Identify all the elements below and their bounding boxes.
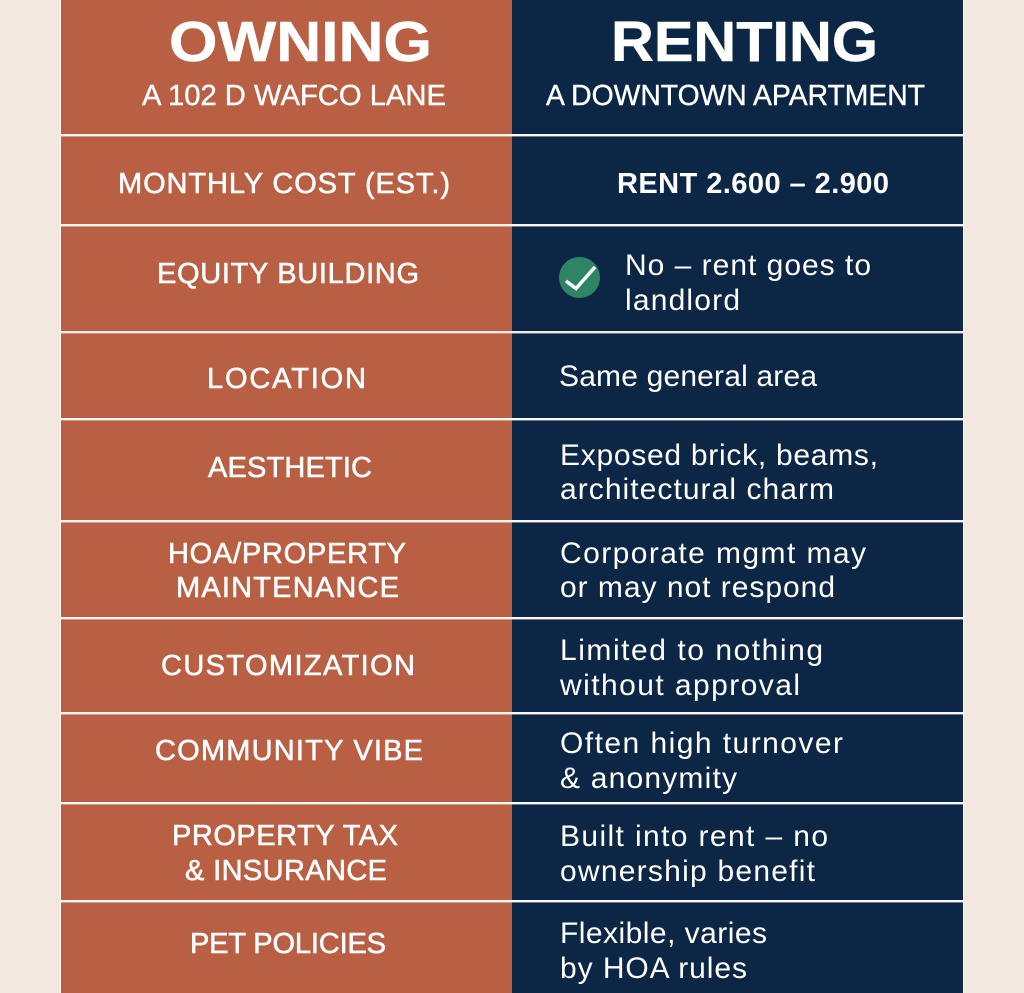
row: community vibe: COMMUNITY VIBE xyxy=(155,735,423,767)
row: equity building: EQUITY BUILDING xyxy=(157,258,419,290)
row: community vibe: & anonymity xyxy=(560,762,737,795)
row: aesthetic xyxy=(208,439,878,506)
row: pet policies: Flexible, varies xyxy=(560,917,767,950)
row: monthly cost: MONTHLY COST (EST.) xyxy=(118,168,450,200)
row: property tax and insurance xyxy=(172,820,828,888)
icon: green check xyxy=(559,257,600,298)
row: monthly cost xyxy=(118,168,889,200)
row: hoa/property maintenance: or may not respond xyxy=(560,571,835,604)
row: customization: without approval xyxy=(559,669,800,702)
row: property tax and insurance: Built into rent – no xyxy=(560,820,828,853)
row: community vibe xyxy=(155,727,843,795)
row: customization: Limited to nothing xyxy=(560,634,823,667)
header: renting xyxy=(546,10,925,112)
header: owning: OWNING xyxy=(169,10,432,74)
row: property tax and insurance: ownership benefit xyxy=(560,855,816,888)
header: renting: A DOWNTOWN APARTMENT xyxy=(546,80,925,112)
row: property tax and insurance: & INSURANCE xyxy=(185,855,387,887)
row: customization xyxy=(161,634,823,702)
row: equity building: No – rent goes to xyxy=(625,249,871,282)
row: aesthetic: AESTHETIC xyxy=(208,452,372,484)
row: customization: CUSTOMIZATION xyxy=(161,650,415,682)
row: aesthetic: Exposed brick, beams, xyxy=(560,439,878,472)
row: monthly cost: RENT 2.600 – 2.900 xyxy=(617,168,889,200)
row: hoa/property maintenance: MAINTENANCE xyxy=(176,572,399,604)
row: equity building: landlord xyxy=(625,284,740,317)
header: owning: A 102 D WAFCO LANE xyxy=(142,80,446,112)
row: location: Same general area xyxy=(559,360,817,393)
row: hoa/property maintenance: HOA/PROPERTY xyxy=(168,538,406,570)
row: community vibe: Often high turnover xyxy=(560,727,843,760)
row: pet policies: by HOA rules xyxy=(560,952,747,985)
row: property tax and insurance: PROPERTY TAX xyxy=(172,820,398,852)
row: equity building xyxy=(157,249,871,317)
header: owning xyxy=(142,10,446,112)
row: pet policies xyxy=(190,917,767,985)
row: location xyxy=(207,360,817,395)
row: aesthetic: architectural charm xyxy=(560,473,834,506)
row: hoa/property maintenance xyxy=(168,537,866,604)
row: location: LOCATION xyxy=(207,363,366,395)
header: renting: RENTING xyxy=(611,10,878,74)
row: pet policies: PET POLICIES xyxy=(190,928,386,960)
row: hoa/property maintenance: Corporate mgmt may xyxy=(560,537,866,570)
